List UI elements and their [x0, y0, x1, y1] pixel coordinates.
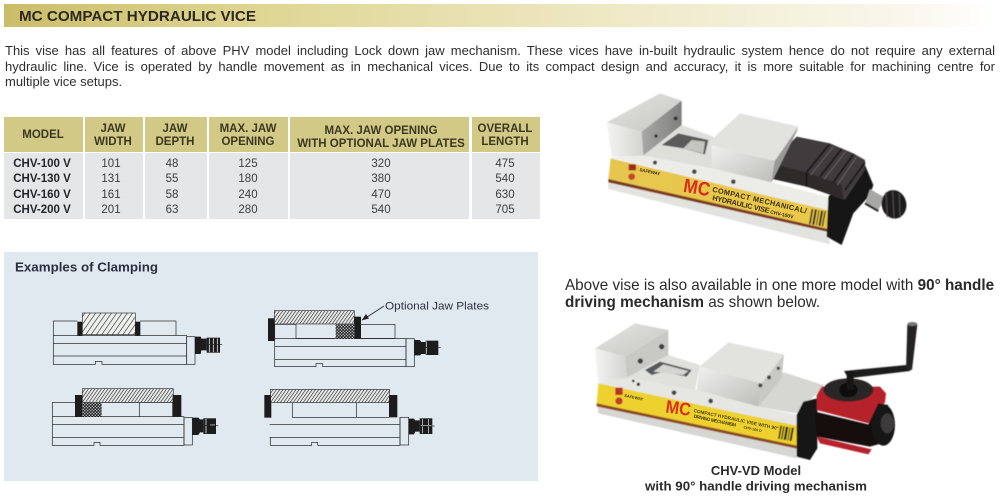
title banner: MC COMPACT HYDRAULIC VICE [19, 9, 256, 25]
intro paragraph [5, 43, 995, 89]
title banner [4, 4, 1000, 27]
table header: LENGTH [481, 136, 529, 148]
table header: MAX. JAW [220, 123, 277, 135]
photo: CHV hydraulic vice: COMPACT MECHANICAL/ [712, 185, 808, 215]
table header: WITH OPTIONAL JAW PLATES [297, 138, 465, 150]
table header: JAW [101, 123, 126, 135]
intro paragraph: hydraulic line. Vice is operated by handle movement as in mechanical vices. Due to its compact design and accuracy, it is more suitable for machining centre for [5, 58, 995, 74]
photo: CHV-VD vice with 90 degree handle [595, 322, 917, 460]
table body: 161 [101, 189, 121, 201]
table body: CHV-130 V [13, 173, 71, 185]
table header: DEPTH [156, 136, 194, 148]
table body: 320 [371, 158, 391, 170]
photo: CHV hydraulic vice [607, 93, 909, 245]
table header: MODEL [22, 129, 64, 141]
table header: WIDTH [94, 136, 132, 148]
table header: JAW [163, 123, 188, 135]
photo caption: CHV-VD Model [711, 463, 801, 478]
table body: CHV-200 V [13, 204, 71, 216]
photo: CHV-VD vice with 90 degree handle: MC [664, 396, 692, 420]
intro paragraph: multiple vice setups. [5, 74, 122, 89]
table body: 180 [238, 173, 258, 185]
table body: 705 [495, 204, 515, 216]
callout: optional jaw plates [362, 300, 490, 320]
photo: CHV-VD vice with 90 degree handle: COMPACT HYDRAULIC VISE WITH 90° [693, 408, 779, 431]
table body: 125 [238, 158, 258, 170]
table body: 201 [101, 204, 121, 216]
diagram: clamping example 4 [264, 389, 435, 445]
diagram: clamping example 3 [52, 389, 218, 445]
table body: 240 [238, 189, 258, 201]
text: also available note [565, 277, 994, 311]
table body: 48 [166, 158, 178, 170]
photo caption [644, 463, 867, 494]
photo: CHV-VD vice with 90 degree handle: CHV-160 D [743, 425, 762, 433]
table body: 540 [495, 173, 515, 185]
table header: OVERALL [478, 123, 532, 135]
table body: 475 [495, 158, 515, 170]
photo: CHV hydraulic vice: HYDRAULIC VISE [712, 193, 771, 215]
photo: CHV hydraulic vice: MC [682, 176, 712, 201]
table body: CHV-160 V [13, 189, 71, 201]
photo caption: with 90° handle driving mechanism [644, 478, 867, 494]
panel heading: Examples of Clamping [15, 260, 158, 274]
table body: 630 [495, 189, 515, 201]
panel: examples of clamping [4, 252, 538, 481]
text: also available note: driving mechanism as shown below. [565, 294, 820, 311]
photo: CHV hydraulic vice: CHV-100V [770, 209, 795, 221]
table body: CHV-100 V [13, 158, 71, 170]
diagram: clamping example 2 [268, 311, 441, 367]
table body: 470 [371, 189, 391, 201]
table body: 380 [371, 173, 391, 185]
table header [4, 117, 540, 152]
table body: 63 [166, 204, 178, 216]
table body [4, 153, 540, 219]
specifications table [4, 117, 540, 219]
photo: CHV hydraulic vice: SAFEWAY [639, 167, 661, 176]
photo: CHV-VD vice with 90 degree handle: SAFEWAY [624, 393, 644, 402]
table header: OPENING [221, 136, 275, 148]
table body: 540 [371, 204, 391, 216]
photo: CHV-VD vice with 90 degree handle: DRIVING MECHANISM [693, 414, 737, 428]
table body: 131 [101, 173, 121, 185]
table body: 101 [101, 158, 121, 170]
intro paragraph: This vise has all features of above PHV model including Lock down jaw mechanism. These vices have in-built hydraulic system hence do not require any external [5, 43, 995, 58]
table header: MAX. JAW OPENING [324, 125, 438, 137]
diagram: clamping example 1 [53, 313, 222, 364]
text: also available note: Above vise is also available in one more model with 90° handle [565, 277, 994, 294]
callout: optional jaw plates: Optional Jaw Plates [385, 300, 490, 312]
table body: 280 [238, 204, 258, 216]
table body: 55 [166, 173, 178, 185]
table body: 58 [166, 189, 178, 201]
